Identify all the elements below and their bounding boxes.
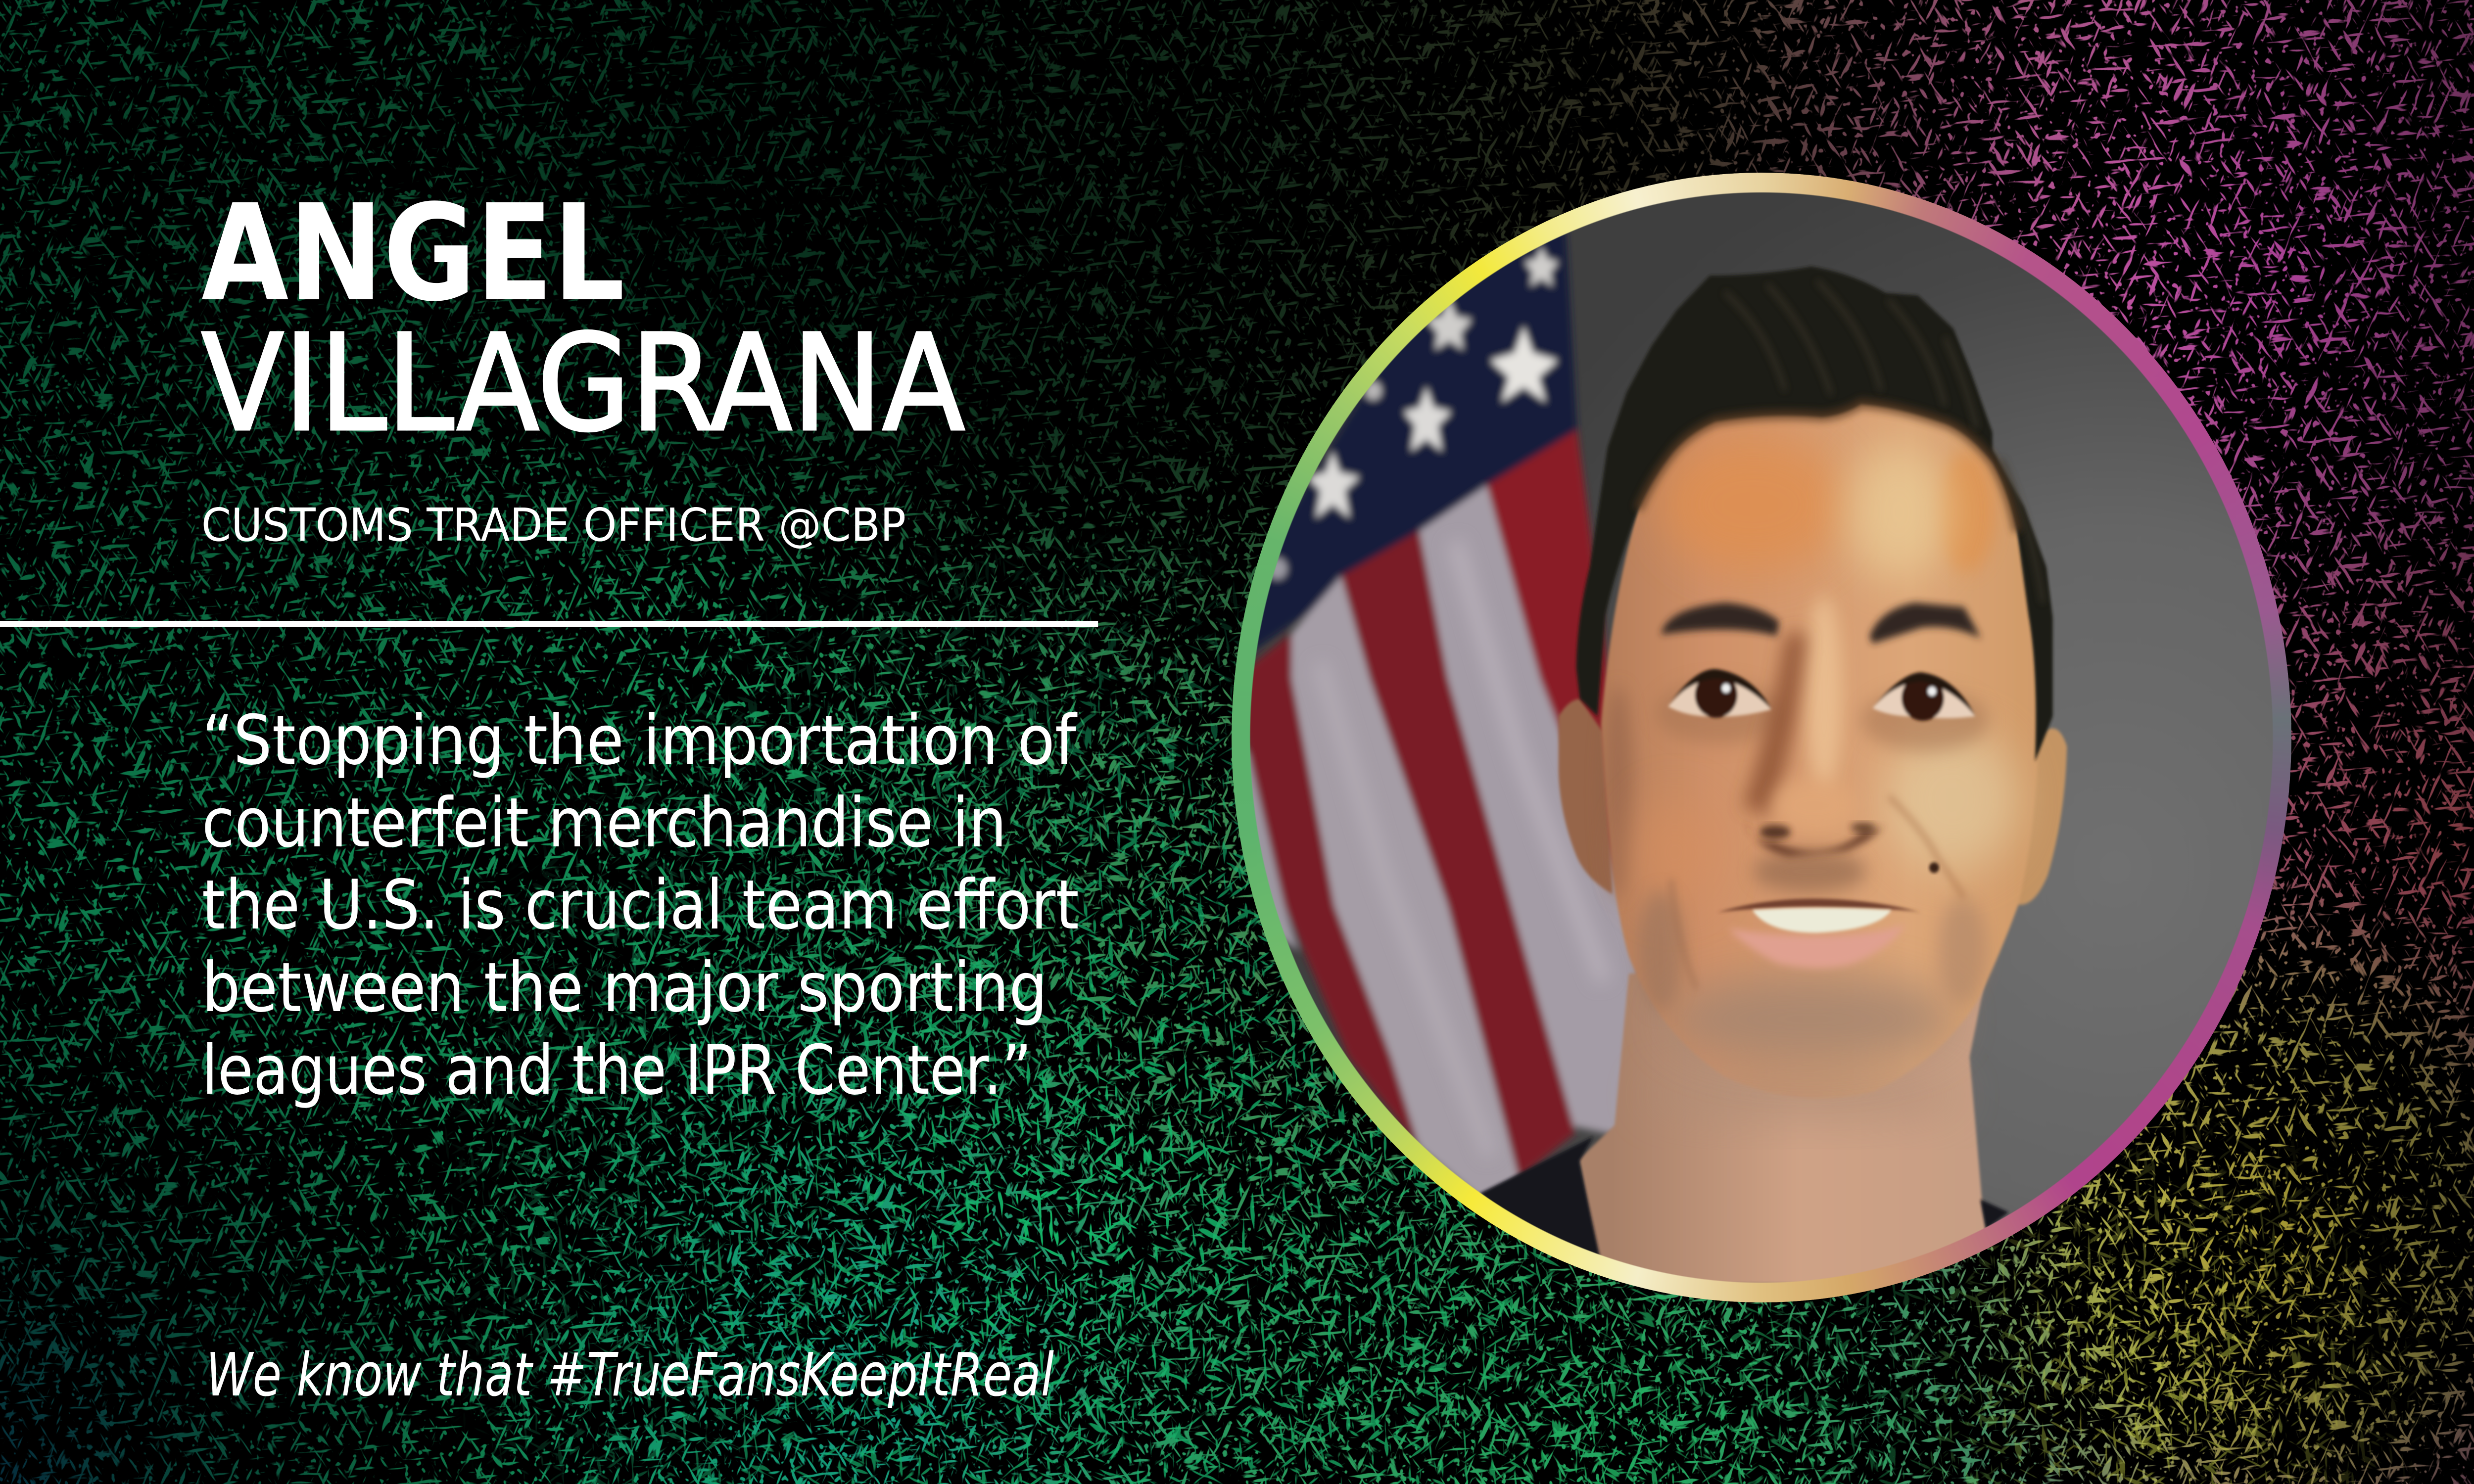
quote	[202, 700, 1079, 1110]
shirt	[1479, 1136, 2008, 1284]
mouth	[1717, 862, 1939, 968]
neck	[1579, 951, 1995, 1284]
quote: counterfeit merchandise in	[202, 783, 1007, 863]
eyebrows	[1661, 603, 1981, 644]
gradient ring around portrait	[1232, 173, 2291, 1302]
quote: “Stopping the importation of	[202, 700, 1078, 780]
title: name	[201, 176, 965, 461]
eyes	[1667, 669, 1975, 721]
divider line	[0, 621, 1098, 627]
face shading	[1602, 436, 2019, 1117]
hashtag tagline: We know that #TrueFansKeepItReal	[206, 1341, 1054, 1410]
quote: leagues and the IPR Center.”	[202, 1030, 1032, 1110]
portrait photo in circle	[1250, 192, 2273, 1283]
American flag	[1235, 223, 1639, 1208]
hair	[1576, 267, 2052, 762]
nose	[1745, 778, 1885, 856]
quote: the U.S. is crucial team effort	[202, 865, 1079, 945]
title: name: VILLAGRANA	[201, 306, 965, 461]
flag folds	[1320, 542, 1604, 1156]
job title: CUSTOMS TRADE OFFICER @CBP	[201, 499, 906, 552]
title: name: ANGEL	[201, 176, 625, 331]
quote: between the major sporting	[202, 948, 1047, 1027]
ears	[1558, 699, 2067, 905]
grey studio backdrop	[1206, 148, 2320, 1336]
face	[1601, 404, 2038, 1098]
